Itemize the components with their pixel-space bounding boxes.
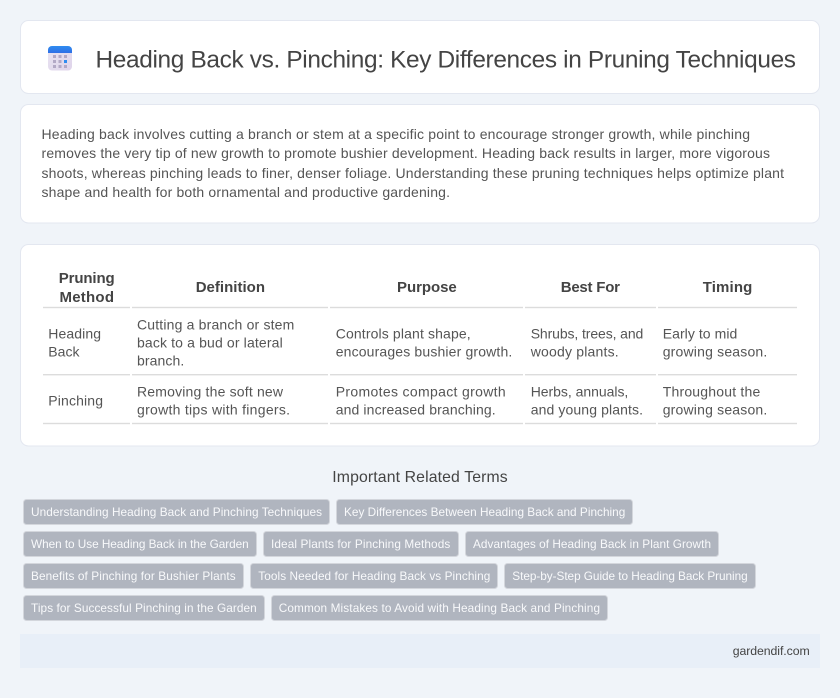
table row: pinching: Removing the soft new — [137, 384, 284, 400]
table row: heading back — [48, 316, 767, 368]
table row: pinching: growing season. — [663, 401, 767, 417]
table row: pinching — [48, 384, 767, 417]
panel: related term chips — [24, 500, 756, 620]
chip — [250, 564, 498, 588]
chip — [272, 596, 608, 620]
chip: Tools Needed for Heading Back vs Pinching — [258, 569, 490, 583]
chip: Understanding Heading Back and Pinching Techniques — [31, 505, 322, 519]
footer site name: gardendif.com — [733, 644, 810, 658]
chip — [336, 500, 632, 524]
table row: pinching: Throughout the — [663, 384, 761, 400]
table row: pinching: Herbs, annuals, — [531, 384, 628, 400]
chip: Advantages of Heading Back in Plant Growth — [473, 537, 711, 551]
table row: pinching: Promotes compact growth — [336, 384, 506, 400]
chip: When to Use Heading Back in the Garden — [31, 537, 249, 551]
panel: header — [20, 20, 820, 94]
title: Heading Back vs. Pinching: Key Differences in Pruning Techniques — [96, 46, 796, 74]
table row: heading back: Cutting a branch or stem — [137, 316, 294, 332]
intro text block: Heading back involves cutting a branch or stem at a specific point to encourage stronger growth, while pinching — [42, 126, 750, 142]
chip — [504, 564, 756, 588]
table row: pinching: Pinching — [48, 393, 103, 409]
table header row: Timing — [703, 279, 752, 296]
chip — [24, 532, 256, 556]
table row: heading back: Back — [48, 344, 80, 360]
icon: calendar — [48, 46, 72, 70]
table header row: Best For — [561, 279, 620, 296]
table row: heading back: encourages bushier growth. — [336, 344, 512, 360]
table header row — [59, 270, 752, 306]
table header row: Pruning — [59, 270, 115, 287]
table row: heading back: branch. — [137, 352, 184, 368]
panel: comparison table — [20, 244, 820, 446]
table row: heading back: growing season. — [663, 344, 767, 360]
table row: heading back: Controls plant shape, — [336, 326, 471, 342]
chip — [264, 532, 458, 556]
chip: Step-by-Step Guide to Heading Back Pruning — [512, 569, 748, 583]
chip: Benefits of Pinching for Bushier Plants — [31, 569, 236, 583]
table row: pinching: and young plants. — [531, 401, 643, 417]
table row: pinching: and increased branching. — [336, 401, 496, 417]
table header row: Method — [60, 289, 114, 306]
table header row: Purpose — [397, 279, 457, 296]
intro text block: removes the very tip of new growth to promote bushier development. Heading back results in larger, more vigorous — [42, 145, 770, 161]
table row: heading back: Early to mid — [663, 326, 737, 342]
chip — [24, 500, 330, 524]
panel: introduction — [20, 104, 820, 223]
table header row: Definition — [196, 279, 265, 296]
chip: Tips for Successful Pinching in the Garden — [31, 601, 257, 615]
chip: Common Mistakes to Avoid with Heading Back and Pinching — [279, 601, 600, 615]
intro text block: shape and health for both ornamental and productive gardening. — [42, 184, 450, 200]
intro text block: shoots, whereas pinching leads to finer, denser foliage. Understanding these pruning techniques helps optimize plant — [42, 165, 784, 181]
table row: heading back: woody plants. — [530, 344, 619, 360]
table row: heading back: Shrubs, trees, and — [531, 326, 643, 342]
chip — [24, 564, 244, 588]
chip: Ideal Plants for Pinching Methods — [271, 537, 450, 551]
chip — [24, 596, 264, 620]
table row: heading back: back to a bud or lateral — [137, 334, 283, 350]
table row: pinching: growth tips with fingers. — [137, 401, 290, 417]
intro text block — [42, 126, 784, 200]
chip — [466, 532, 718, 556]
chip: Key Differences Between Heading Back and Pinching — [344, 505, 625, 519]
heading: important related terms: Important Related Terms — [332, 469, 508, 486]
footer — [20, 634, 820, 668]
table row: heading back: Heading — [48, 326, 101, 342]
